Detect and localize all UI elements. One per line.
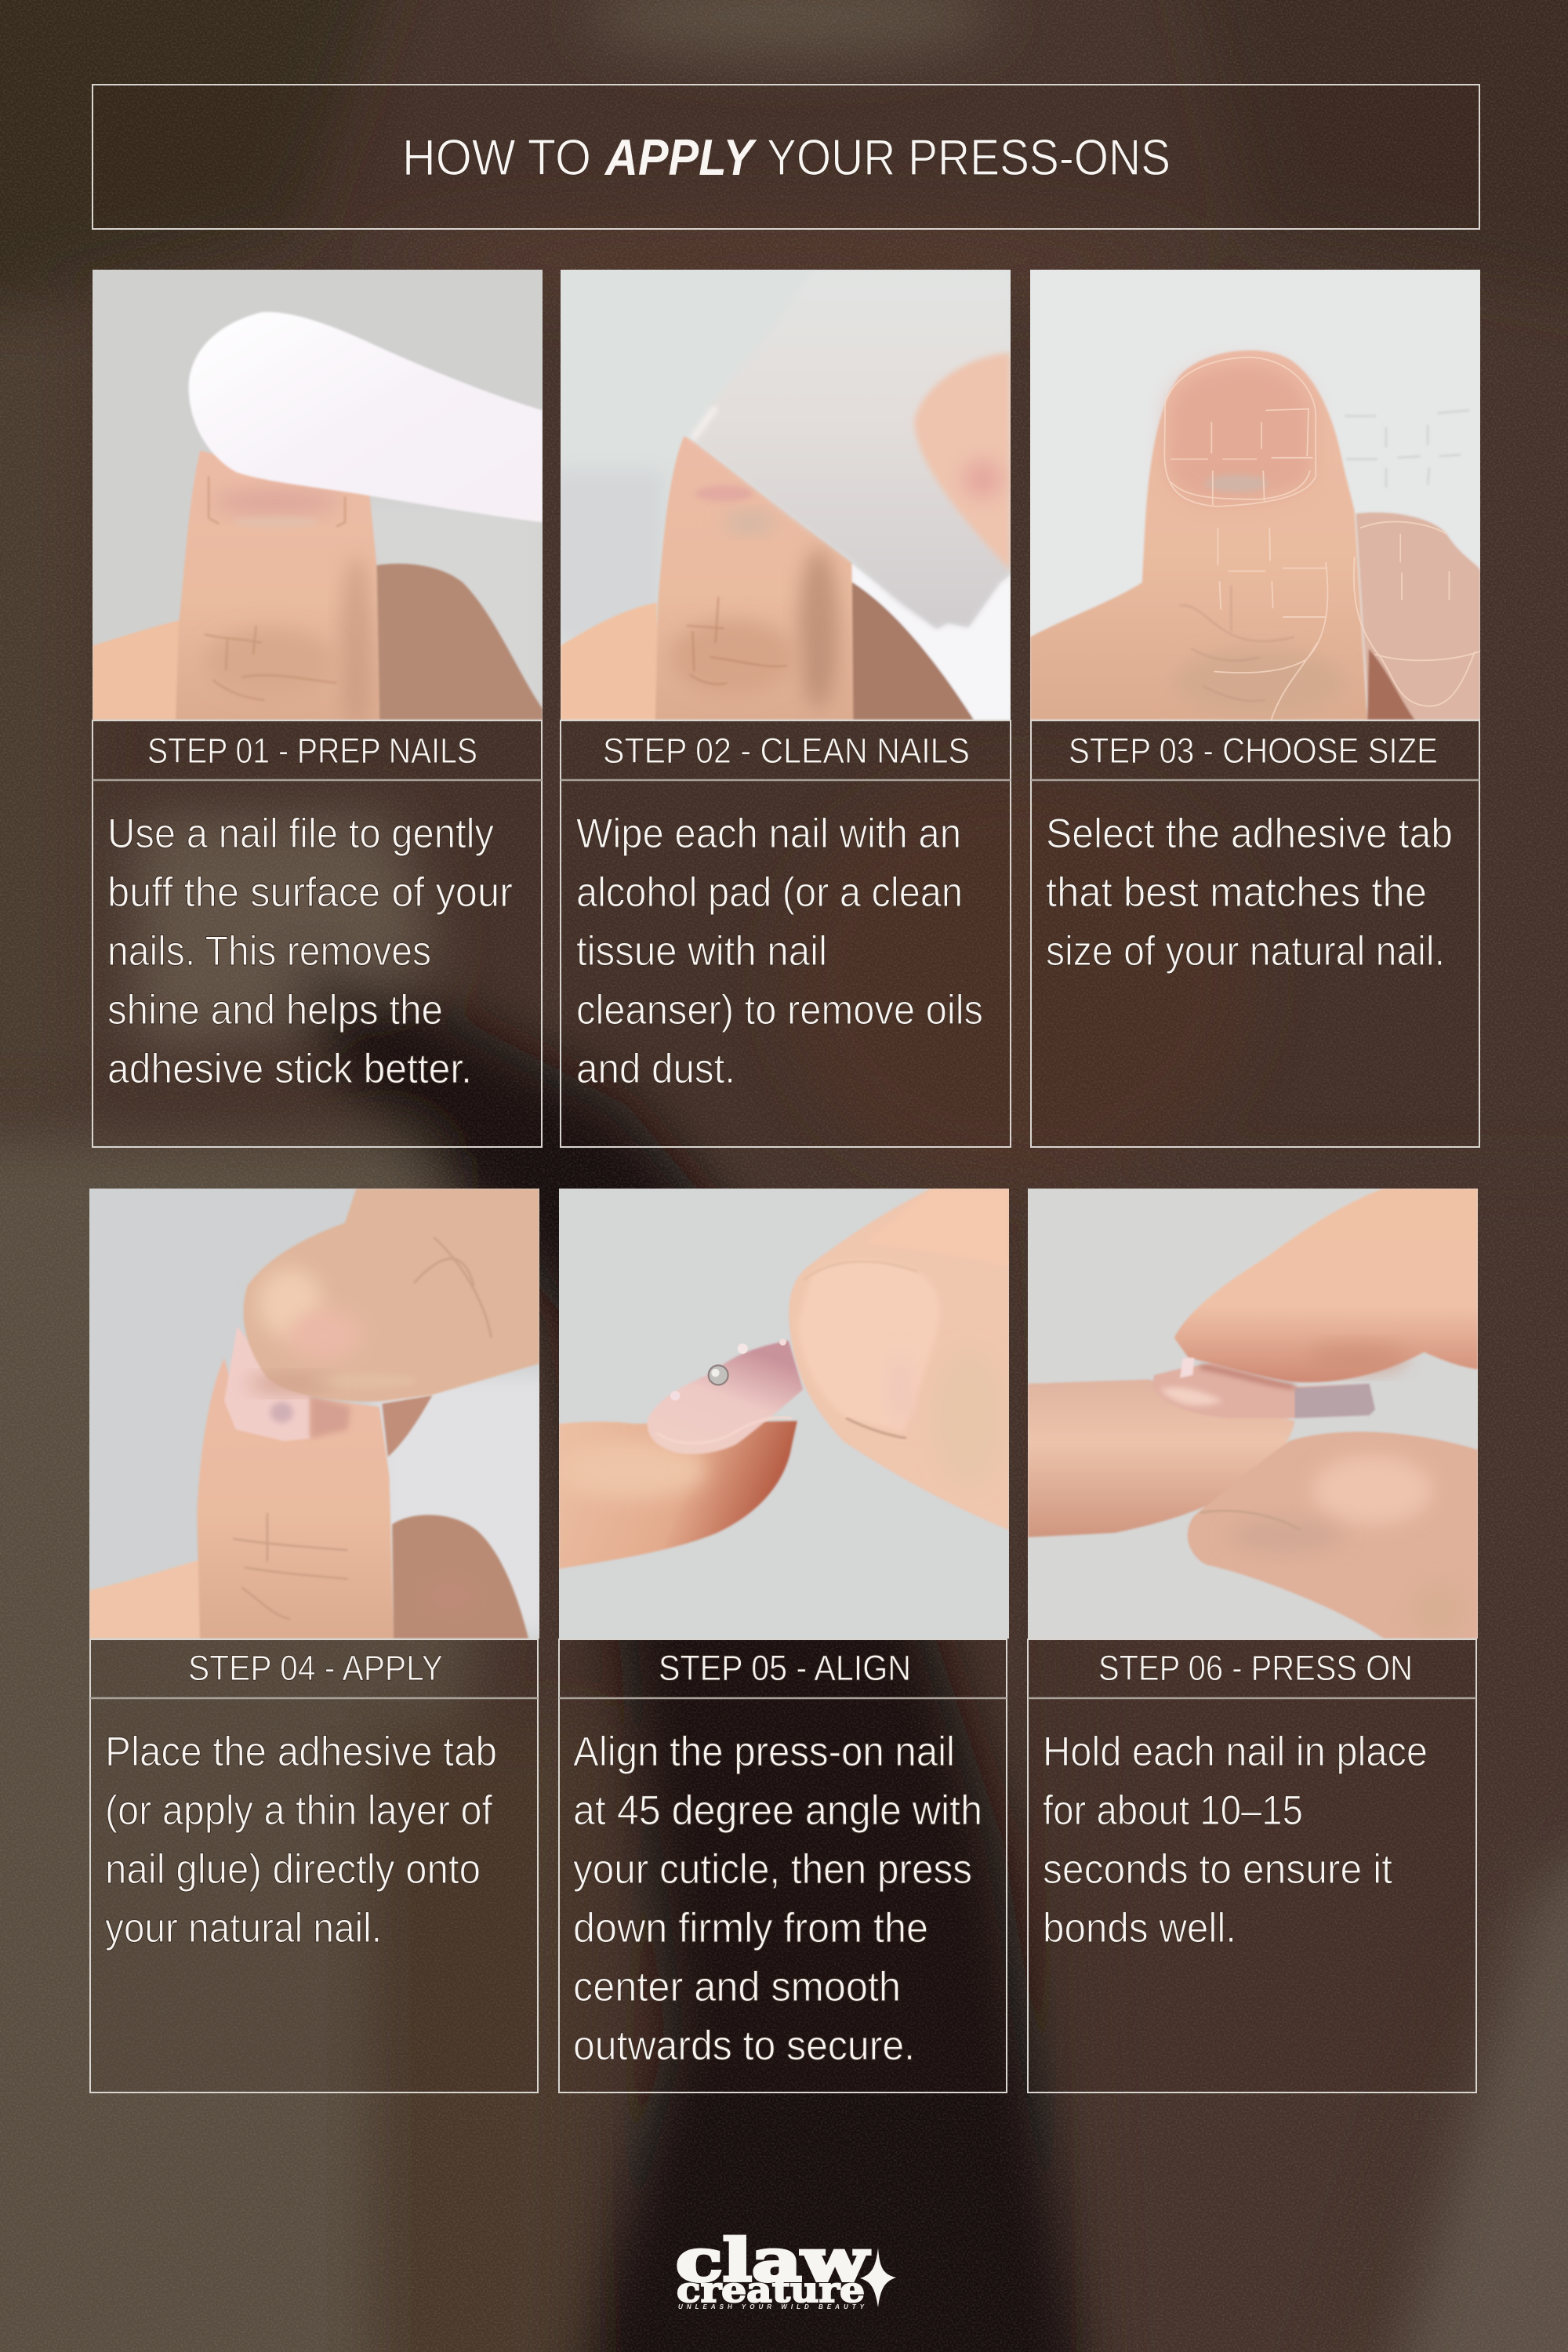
step description: Align the press-on nail bbox=[573, 1729, 955, 1775]
step description: your cuticle, then press bbox=[573, 1846, 972, 1893]
photo: nail file on thumbnail bbox=[93, 270, 543, 720]
step label: STEP 06 - PRESS ON bbox=[1098, 1648, 1413, 1688]
step label: STEP 01 - PREP NAILS bbox=[147, 731, 477, 771]
panel: step 02 bbox=[549, 270, 1011, 1147]
step description: for about 10–15 bbox=[1043, 1788, 1303, 1834]
step description: that best matches the bbox=[1046, 869, 1427, 916]
step description: Hold each nail in place bbox=[1043, 1729, 1428, 1775]
step description bbox=[559, 1698, 1007, 2092]
step description: your natural nail. bbox=[105, 1905, 382, 1951]
step description: nails. This removes bbox=[107, 928, 431, 975]
step label: STEP 02 - CLEAN NAILS bbox=[603, 731, 970, 771]
step description: buff the surface of your bbox=[107, 869, 513, 916]
photo: aligning press-on nail bbox=[559, 1189, 1009, 1639]
step description: and dust. bbox=[576, 1046, 735, 1092]
step description: Select the adhesive tab bbox=[1046, 811, 1453, 857]
step description: Use a nail file to gently bbox=[107, 811, 494, 857]
title panel bbox=[93, 85, 1479, 229]
step description: adhesive stick better. bbox=[107, 1046, 472, 1092]
step label bbox=[93, 720, 542, 780]
title text bbox=[402, 129, 1171, 186]
panel: step 01 bbox=[93, 270, 543, 1147]
step description: Place the adhesive tab bbox=[105, 1729, 497, 1775]
photo: applying tab with finger bbox=[89, 1189, 539, 1639]
logo: claw creature: UNLEASH YOUR WILD BEAUTY bbox=[678, 2303, 865, 2310]
logo: claw creature: claw bbox=[676, 2227, 870, 2295]
step description: center and smooth bbox=[573, 1964, 901, 2010]
step description: nail glue) directly onto bbox=[105, 1846, 481, 1893]
step label bbox=[561, 720, 1011, 780]
step description: bonds well. bbox=[1043, 1905, 1236, 1951]
logo: claw creature: creature bbox=[677, 2270, 865, 2310]
step description: seconds to ensure it bbox=[1043, 1846, 1392, 1893]
step label bbox=[559, 1639, 1007, 1698]
panel: step 04 bbox=[89, 1189, 554, 2092]
step description: alcohol pad (or a clean bbox=[576, 869, 963, 916]
step description: (or apply a thin layer of bbox=[105, 1788, 492, 1834]
step description: size of your natural nail. bbox=[1046, 928, 1445, 975]
title text: APPLY bbox=[604, 129, 757, 186]
photo: adhesive tabs over thumb bbox=[1030, 270, 1480, 720]
panel: step 06 bbox=[1028, 1189, 1478, 2092]
step label bbox=[1031, 720, 1479, 780]
icon: sparkle star bbox=[860, 2248, 896, 2307]
logo: claw creature bbox=[676, 2227, 896, 2310]
step description: cleanser) to remove oils bbox=[576, 987, 983, 1033]
step description bbox=[93, 780, 542, 1147]
photo: pressing on nail bbox=[1028, 1189, 1478, 1639]
step description bbox=[1031, 780, 1479, 1147]
step label bbox=[90, 1639, 538, 1698]
title text: HOW TO bbox=[402, 129, 591, 186]
step description: outwards to secure. bbox=[573, 2023, 915, 2069]
step label bbox=[1028, 1639, 1476, 1698]
step description: down firmly from the bbox=[573, 1905, 928, 1951]
step description bbox=[1028, 1698, 1476, 2092]
step label: STEP 05 - ALIGN bbox=[659, 1648, 911, 1688]
panel: step 03 bbox=[1030, 270, 1480, 1147]
step description bbox=[561, 780, 1011, 1147]
title text: YOUR PRESS-ONS bbox=[767, 129, 1171, 186]
step description bbox=[90, 1698, 538, 2092]
step description: Wipe each nail with an bbox=[576, 811, 961, 857]
step description: shine and helps the bbox=[107, 987, 443, 1033]
panel: step 05 bbox=[556, 1189, 1009, 2092]
step description: tissue with nail bbox=[576, 928, 827, 975]
step description: at 45 degree angle with bbox=[573, 1788, 982, 1834]
photo: wiping nail with tissue bbox=[561, 270, 1011, 720]
step label: STEP 04 - APPLY bbox=[188, 1648, 443, 1688]
step label: STEP 03 - CHOOSE SIZE bbox=[1069, 731, 1438, 771]
